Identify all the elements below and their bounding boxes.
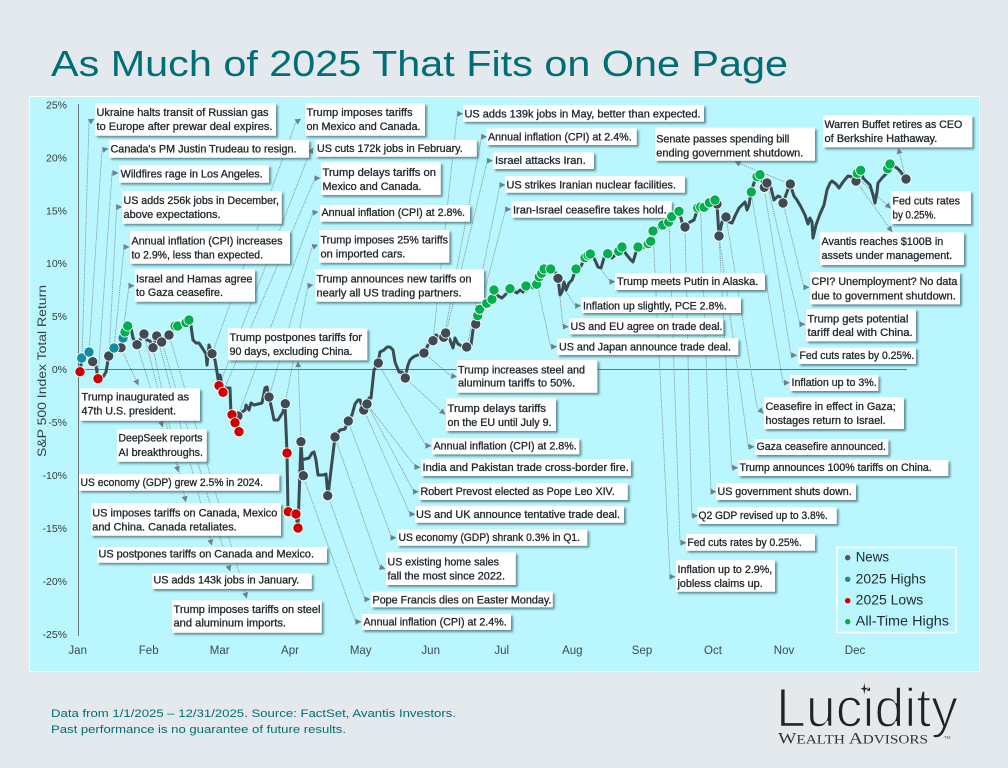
arrow: Gaza announced xyxy=(719,236,754,447)
arrow: 100% China xyxy=(719,236,738,468)
callout: Inflation 2.9 xyxy=(676,560,775,592)
line chart: S&P 500 total return xyxy=(80,164,906,528)
callout: Israel Hamas: to Gaza ceasefire. xyxy=(136,287,223,299)
callout: Israel Hamas: Israel and Hamas agree xyxy=(136,273,253,285)
callout: CPI 2.4: Annual inflation (CPI) at 2.4%. xyxy=(488,132,632,144)
arrow: Ukraine xyxy=(82,119,94,358)
arrow: CPI 2.4 Jun xyxy=(444,137,487,337)
callout: Canada tariffs xyxy=(91,503,281,536)
logo: Lucidity Wealth Advisors: TM xyxy=(944,735,951,740)
callout: steel xyxy=(172,600,322,633)
callout: Trudeau xyxy=(109,140,309,158)
arrow: Mexico Canada xyxy=(212,119,301,354)
x-axis month labels xyxy=(68,645,865,657)
callout: 90 days: 90 days, excluding China. xyxy=(230,346,352,358)
legend: News xyxy=(856,550,889,565)
callout: Senate xyxy=(655,128,815,161)
callout: Gaza effect: hostages return to Israel. xyxy=(766,415,886,427)
callout: steel 50: Trump increases steel and xyxy=(458,364,585,376)
callout: Mexico Canada: on Mexico and Canada. xyxy=(306,121,420,133)
callout: Ukraine: to Europe after prewar deal expires. xyxy=(96,121,272,133)
callout: Iran ceasefire xyxy=(512,201,672,218)
arrow: 172k xyxy=(219,148,313,386)
y-axis tick labels xyxy=(42,100,67,641)
x-axis month labels: Mar xyxy=(210,645,230,657)
x-axis month labels: Jun xyxy=(421,645,440,657)
arrow: home sales xyxy=(335,437,385,569)
callout: shutdown: US government shuts down. xyxy=(718,486,852,498)
arrow: 256k jobs xyxy=(109,207,122,356)
arrows: leader lines xyxy=(82,114,906,622)
callout: 256k: US adds 256k jobs in December, xyxy=(124,195,279,207)
callout: inauguration: Trump inaugurated as xyxy=(82,392,189,404)
callout: home sales xyxy=(386,552,516,585)
callout: Warren: Warren Buffet retires as CEO xyxy=(824,119,962,131)
arrow: CPI 2.4 xyxy=(303,476,361,622)
callout: cars xyxy=(319,230,449,263)
callout: India xyxy=(421,459,631,476)
legend xyxy=(837,548,956,632)
callout: Israel attacks: Israel attacks Iran. xyxy=(495,155,586,167)
callout: steel 50: aluminum tariffs to 50%. xyxy=(458,378,575,390)
x-axis month labels: Dec xyxy=(845,645,865,657)
x-axis month labels: Oct xyxy=(704,645,723,657)
callout: Gaza announced: Gaza ceasefire announced. xyxy=(756,441,886,453)
data points: all-time highs xyxy=(120,159,895,337)
callout: DeepSeek: DeepSeek reports xyxy=(118,433,202,445)
callout: Mexico Canada xyxy=(305,103,425,136)
y-axis tick labels: -25% xyxy=(42,629,67,641)
arrow: Senate xyxy=(735,162,790,184)
callout: CPI 2.9: Annual inflation (CPI) increases xyxy=(132,236,282,248)
callout: steel 50 xyxy=(457,360,597,393)
callout: Pope Francis: Pope Francis dies on Easter Monday. xyxy=(372,594,552,606)
callout: inauguration xyxy=(80,388,200,421)
callout: Gaza effect: Ceasefire in effect in Gaza; xyxy=(766,401,896,413)
arrow: postpones xyxy=(157,336,212,545)
data points: news xyxy=(88,174,911,501)
legend: 2025 Lows xyxy=(856,592,924,607)
callout: China deal: tariff deal with China. xyxy=(808,327,913,339)
arrow: DeepSeek xyxy=(137,345,163,427)
arrow: shutdown xyxy=(701,213,716,492)
arrow: GDP 2.5 xyxy=(144,334,178,472)
arrow: Inflation 3 xyxy=(751,192,789,383)
logo: Lucidity Wealth Advisors: W EALTH ADVISORS xyxy=(778,730,928,747)
callout: EU delay: Trump delays tariffs xyxy=(448,403,546,415)
arrow: 139k xyxy=(433,114,463,341)
callout: Ukraine xyxy=(95,103,276,136)
callout: cars: Trump imposes 25% tariffs xyxy=(320,234,448,246)
x-axis month labels: Apr xyxy=(281,645,299,657)
callout: postpones: US postpones tariffs on Canada and Mexico. xyxy=(98,549,314,561)
arrow: PCE xyxy=(558,278,581,306)
data points: 2025 lows xyxy=(75,367,303,533)
callout: DeepSeek xyxy=(117,429,207,462)
callout: new tariffs: Trump announces new tariffs on xyxy=(316,273,472,285)
callout: Fed Oct: Fed cuts rates by 0.25%. xyxy=(800,350,914,362)
y-axis tick labels: 10% xyxy=(46,258,67,270)
callout: inauguration: 47th U.S. president. xyxy=(82,406,176,418)
arrow: Iran ceasefire xyxy=(476,209,511,324)
arrow: Fed Oct xyxy=(764,187,797,355)
arrow: CPI 2.8 May xyxy=(378,363,431,446)
arrow: Fed Sep xyxy=(669,222,686,543)
callout: CPI 2.4 xyxy=(487,128,637,145)
callout: Ukraine: Ukraine halts transit of Russian gas xyxy=(96,107,268,119)
callout: Q2 GDP: Q2 GDP revised up to 3.8%. xyxy=(698,510,828,522)
arrow: Q2 GDP xyxy=(685,227,698,516)
arrow: 25% cars xyxy=(269,245,318,397)
callout: 172k: US cuts 172k jobs in February. xyxy=(317,143,463,155)
callout: CPI 2.4 Apr: Annual inflation (CPI) at 2.4%. xyxy=(364,616,507,628)
footer note xyxy=(51,708,456,736)
arrow: steel 50 xyxy=(424,353,457,377)
callout: Iran ceasefire: Iran-Israel ceasefire takes hold. xyxy=(513,204,667,216)
callout: Avantis: assets under management. xyxy=(822,250,952,262)
callout: Putin: Trump meets Putin in Alaska. xyxy=(617,276,758,288)
callout: Inflation 2.9: jobless claims up. xyxy=(676,578,763,590)
callout: Prevost xyxy=(419,483,628,500)
callout: Japan xyxy=(557,338,738,355)
callout: DeepSeek: AI breakthroughs. xyxy=(118,447,203,459)
callout: steel: and aluminum imports. xyxy=(174,618,286,630)
callout: 172k xyxy=(316,140,477,157)
callout: new tariffs xyxy=(315,269,484,302)
callout: new tariffs: nearly all US trading partners. xyxy=(316,288,462,300)
x-axis month labels: Nov xyxy=(774,645,794,657)
callout: 139k: US adds 139k jobs in May, better than expected. xyxy=(464,108,700,120)
arrow: CPI 2.9 xyxy=(114,247,129,348)
arrow: Warren xyxy=(898,148,906,179)
x-axis month labels: Aug xyxy=(562,645,583,657)
arrow: EU deal xyxy=(558,278,568,327)
callout: Avantis: Avantis reaches $100B in xyxy=(822,236,943,248)
callout: 139k xyxy=(463,105,704,122)
arrow: Pope Francis xyxy=(328,496,370,599)
arrow: Fed Dec xyxy=(860,180,891,208)
y-axis tick labels: 15% xyxy=(46,206,67,218)
callout: steel: Trump imposes tariffs on steel xyxy=(174,604,320,616)
callout: CPI 2.8 xyxy=(320,205,470,222)
arrow: No data xyxy=(783,203,809,287)
callout: Q2 GDP xyxy=(697,507,837,524)
arrow: Japan xyxy=(537,284,557,347)
arrow: 143k xyxy=(162,342,230,571)
arrow: Putin xyxy=(590,254,615,282)
legend: All-Time Highs xyxy=(856,614,949,629)
callout: delays: Trump delays tariffs on xyxy=(322,167,436,179)
callout: UK xyxy=(415,506,624,523)
callout: Japan: US and Japan announce trade deal. xyxy=(559,342,731,354)
legend: 2025 Highs xyxy=(856,571,926,586)
callout: EU delay xyxy=(446,398,556,431)
callout: 143k xyxy=(152,573,312,589)
x-axis month labels: Feb xyxy=(139,645,159,657)
callout: India: India and Pakistan trade cross-border fire. xyxy=(422,462,629,474)
arrow: inaugurated xyxy=(121,348,138,385)
arrow: Inflation 2.9 xyxy=(653,231,675,577)
callout: China deal xyxy=(806,309,916,341)
y-axis tick labels: -15% xyxy=(42,523,67,535)
title: As Much of 2025 That Fits on One Page xyxy=(51,43,788,84)
callout: Senate: ending government shutdown. xyxy=(656,147,803,159)
callout: cars: on imported cars. xyxy=(320,248,406,260)
y-axis tick labels: 0% xyxy=(52,364,67,376)
callout: Fed Dec: by 0.25%. xyxy=(892,209,936,221)
callout: Fed Dec: Fed cuts rates xyxy=(892,195,960,207)
arrow: Wildfires xyxy=(98,173,118,378)
callout: Fed Sep xyxy=(686,534,815,551)
callout: Trudeau: Canada's PM Justin Trudeau to resign. xyxy=(110,143,296,155)
callout: CPI 2.8: Annual inflation (CPI) at 2.8%. xyxy=(322,207,465,219)
arrow: strikes xyxy=(467,185,505,347)
callout: GDP 2024: US economy (GDP) grew 2.5% in 2024. xyxy=(80,477,263,489)
logo: Lucidity Wealth Advisors: Lucidity xyxy=(776,677,958,739)
callout: Wildfires: Wildfires rage in Los Angeles. xyxy=(121,168,263,180)
callout: Canada tariffs: and China. Canada retaliates. xyxy=(92,522,237,534)
y-axis tick labels: -10% xyxy=(42,470,67,482)
arrow: steel imports xyxy=(169,335,247,598)
callout: No data xyxy=(810,272,960,304)
callout: 256k xyxy=(122,191,282,224)
callout: Warren xyxy=(823,115,972,147)
callout: No data: due to government shutdown. xyxy=(812,290,956,302)
y-axis tick labels: 25% xyxy=(46,100,67,112)
arrow: Trudeau xyxy=(89,149,108,352)
callout: Prevost: Robert Prevost elected as Pope Leo XIV. xyxy=(420,486,615,498)
callout: 100%: Trump announces 100% tariffs on China. xyxy=(740,462,932,474)
callout: Israel Hamas xyxy=(135,269,255,302)
callout: 90 days: Trump postpones tariffs for xyxy=(230,332,362,344)
callout: Wildfires xyxy=(119,165,269,183)
arrow: Gaza effect xyxy=(726,217,763,413)
arrow: Prevost xyxy=(367,404,418,492)
x-axis month labels: Jul xyxy=(494,645,509,657)
callout: Warren: of Berkshire Hathaway. xyxy=(824,133,937,145)
y-axis title: S&P 500 Index Total Return xyxy=(35,285,49,457)
y-axis tick labels: 5% xyxy=(52,311,67,323)
callout: strikes: US strikes Iranian nuclear facilities. xyxy=(506,179,676,191)
callout: GDP 2024 xyxy=(79,474,279,491)
callout: GDP Q1: US economy (GDP) shrank 0.3% in Q1. xyxy=(398,532,580,544)
callout: delays: Mexico and Canada. xyxy=(322,181,422,193)
callout: 143k: US adds 143k jobs in January. xyxy=(154,575,299,587)
x-axis month labels: May xyxy=(350,645,372,657)
callout: Canada tariffs: US imposes tariffs on Canada, Mexico xyxy=(92,508,277,520)
arrow: UK xyxy=(364,410,415,514)
callout: Inflation 3: Inflation up to 3%. xyxy=(792,377,877,389)
callout: Fed Dec xyxy=(891,191,971,224)
callout: UK: US and UK announce tentative trade deal. xyxy=(416,509,620,521)
callout: CPI 2.8 May: Annual inflation (CPI) at 2.8%. xyxy=(434,440,577,452)
callout: home sales: US existing home sales xyxy=(388,556,499,568)
callout: Mexico Canada: Trump imposes tariffs xyxy=(306,107,412,119)
callout: CPI 2.9: to 2.9%, less than expected. xyxy=(132,249,263,261)
callout: China deal: Trump gets potential xyxy=(808,313,908,325)
callout: PCE xyxy=(582,297,741,313)
arrow: tariffs Canada xyxy=(153,348,186,502)
callout: Fed Sep: Fed cuts rates by 0.25%. xyxy=(688,537,802,549)
arrow: delays xyxy=(223,178,320,392)
y-axis tick labels: -5% xyxy=(48,417,67,429)
panel: chart background xyxy=(30,96,980,672)
arrow: Israel Hamas xyxy=(121,286,134,348)
arrow: Israel attacks xyxy=(446,161,492,333)
x-axis month labels: Jan xyxy=(68,645,87,657)
arrow: new tariffs xyxy=(285,285,313,404)
callout: 256k: above expectations. xyxy=(124,209,220,221)
callout: EU delay: on the EU until July 9. xyxy=(448,417,552,429)
callout: delays xyxy=(321,162,441,195)
callout: Senate: Senate passes spending bill xyxy=(656,133,789,145)
callout: Inflation 2.9: Inflation up to 2.9%, xyxy=(678,564,772,576)
arrow: Avantis xyxy=(856,181,892,232)
arrow: India xyxy=(367,404,420,467)
callout: Putin xyxy=(615,273,765,290)
arrow: EU delay xyxy=(405,378,445,414)
data points: 2025 highs xyxy=(77,333,128,363)
callout: No data: CPI? Unemployment? No data xyxy=(812,276,957,288)
callout: 100% xyxy=(738,460,948,476)
callout: strikes xyxy=(505,176,685,193)
callout: Israel attacks xyxy=(493,152,594,169)
arrow: GDP Q1 xyxy=(348,421,396,538)
arrow: 90 days xyxy=(298,362,301,441)
callout: EU deal: US and EU agree on trade deal. xyxy=(570,321,722,333)
callouts xyxy=(79,103,972,633)
arrow: CPI 2.8 xyxy=(238,212,318,416)
callout: CPI 2.9 xyxy=(130,231,290,264)
callout: shutdown xyxy=(716,483,856,500)
callout: Gaza effect xyxy=(764,397,904,429)
arrow: China deal xyxy=(767,183,805,324)
callout: home sales: fall the most since 2022. xyxy=(388,570,505,582)
footer note: Past performance is no guarantee of future results. xyxy=(51,724,346,736)
callout: PCE: Inflation up slightly, PCE 2.8%. xyxy=(583,300,727,312)
callout: 90 days xyxy=(228,328,367,360)
y-axis tick labels: -20% xyxy=(42,576,67,588)
footer note: Data from 1/1/2025 – 12/31/2025. Source: FactSet, Avantis Investors. xyxy=(51,708,456,720)
callout: Avantis xyxy=(820,232,964,265)
x-axis month labels: Sep xyxy=(632,645,652,657)
y-axis tick labels: 20% xyxy=(46,152,67,164)
